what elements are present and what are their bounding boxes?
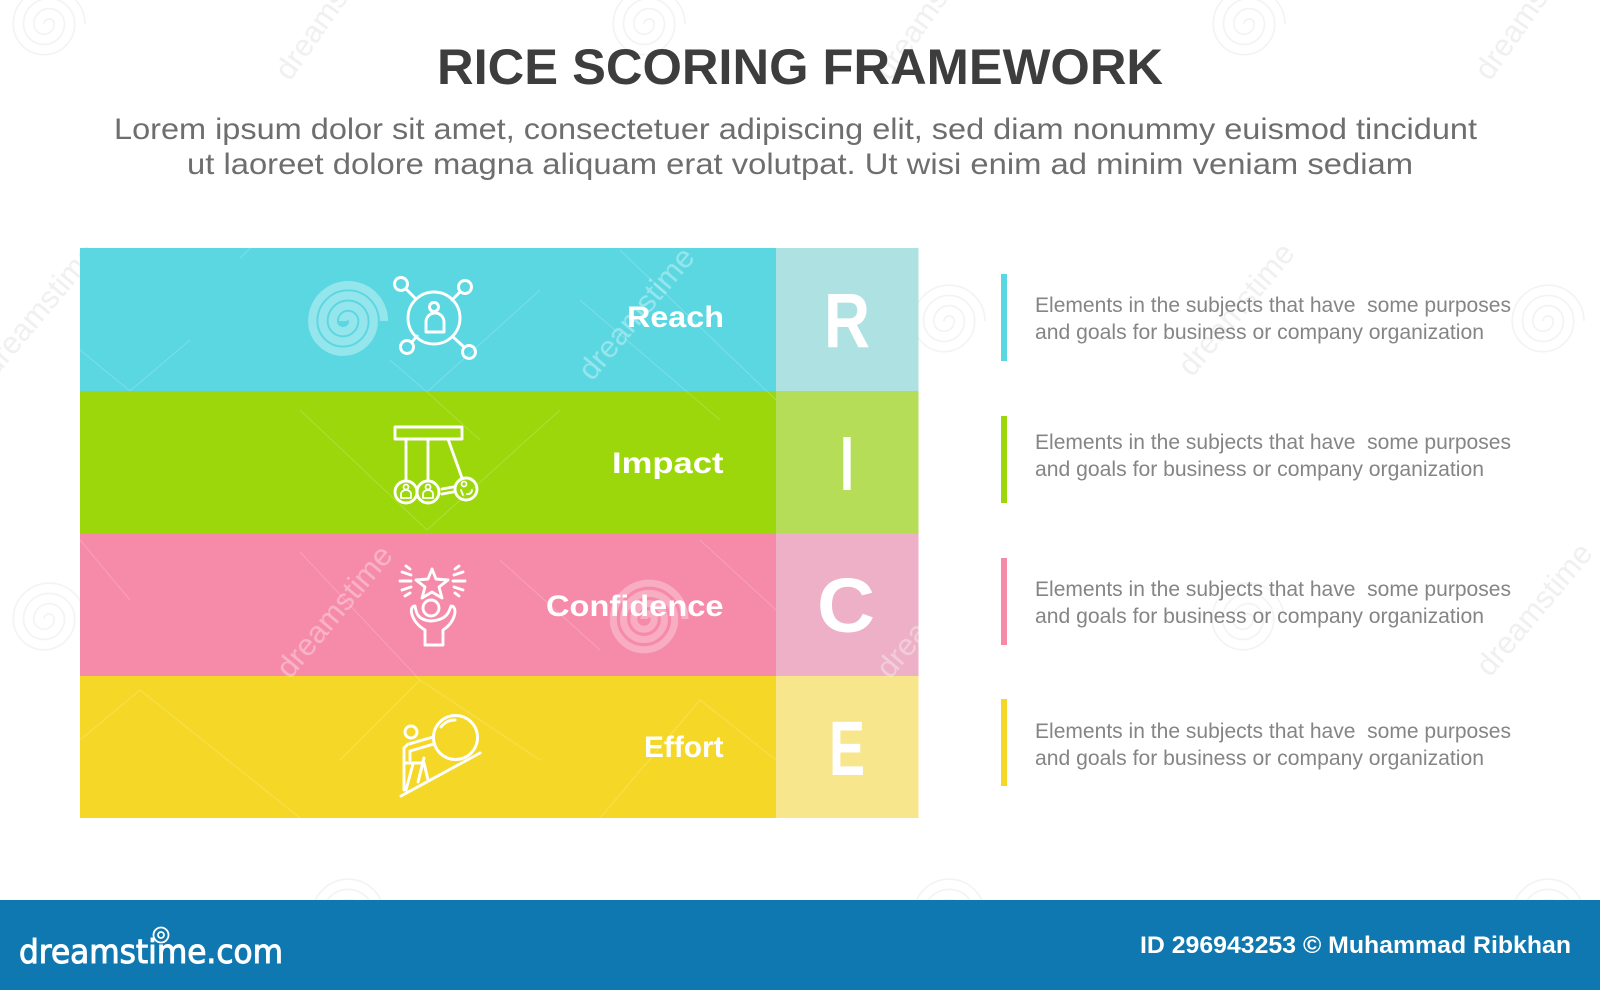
title: RICE SCORING FRAMEWORK [437,39,1163,95]
icon: confidence person with star [400,566,465,645]
description: Confidence: and goals for business or company organization [1035,605,1484,628]
row: Impact: Impact [612,447,724,480]
description: Confidence: Elements in the subjects that have some purposes [1035,578,1511,601]
infographic canvas: dreamstime [571,240,701,386]
row: Effort: E [829,706,865,792]
row: Effort [80,676,918,818]
infographic canvas: dreamstime [1171,236,1301,382]
description: Reach [1001,274,1511,361]
description: Impact [1001,416,1511,503]
description: Effort: Elements in the subjects that have some purposes [1035,720,1511,743]
row: Confidence: C [817,563,875,649]
footer logo: dreamstime.com [19,932,283,971]
infographic canvas: dreamstime [1469,536,1599,682]
description: Impact: Elements in the subjects that have some purposes [1035,431,1511,454]
infographic canvas: dreamstime [269,538,399,684]
description: Reach: Elements in the subjects that have some purposes [1035,294,1511,317]
description: Effort [1001,699,1511,786]
icon: impact newton cradle [395,427,477,503]
description: Impact: and goals for business or company organization [1035,458,1484,481]
row: Reach [80,248,918,391]
description: Confidence [1001,558,1511,645]
row: Effort: Effort [644,731,724,764]
description: Reach: and goals for business or company organization [1035,321,1484,344]
icon: effort person pushing boulder [401,716,480,796]
row: Confidence: Confidence [546,590,724,623]
row: Impact [80,391,918,533]
infographic canvas: dreamstime [869,538,999,684]
subtitle text: ut laoreet dolore magna aliquam erat volutpat. Ut wisi enim ad minim veniam sediam [187,148,1413,181]
row: Reach: R [824,278,870,364]
subtitle text [114,113,1478,181]
subtitle text: Lorem ipsum dolor sit amet, consectetuer adipiscing elit, sed diam nonummy euismod tincidunt [114,113,1478,146]
icon: reach network [394,278,476,358]
row: Reach: Reach [627,301,724,334]
footer credit: ID 296943253 © Muhammad Ribkhan [1140,932,1571,959]
footer bar [0,900,1600,990]
panel: RICE stacked bars [80,248,918,818]
row: Impact: I [840,421,854,507]
row: Confidence [80,533,918,676]
description: Effort: and goals for business or company organization [1035,747,1484,770]
